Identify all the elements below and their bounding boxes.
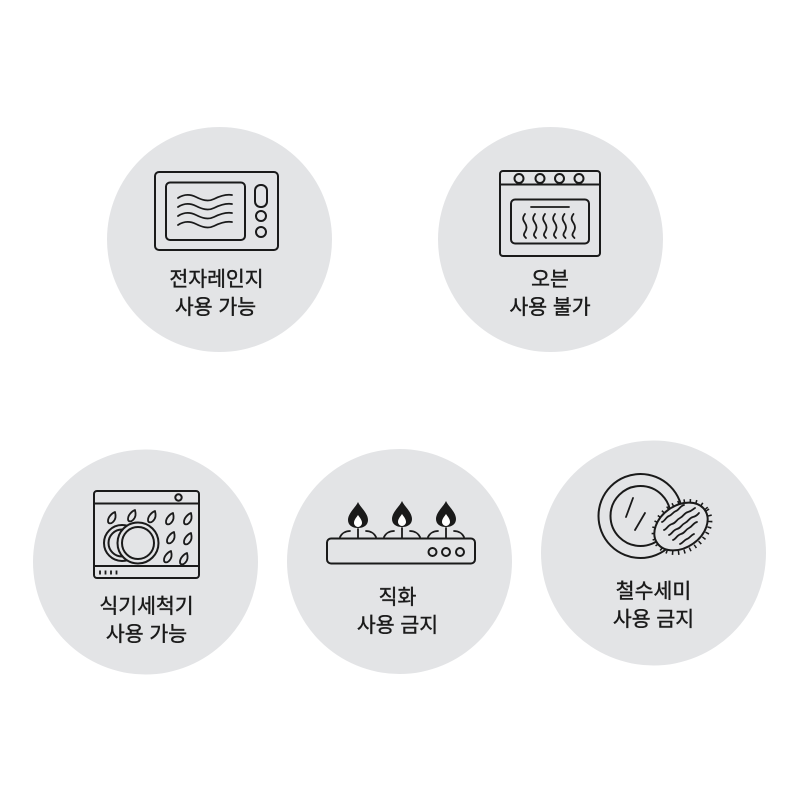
panel: oven — [438, 127, 663, 352]
label: open flame: 직화 — [379, 586, 416, 609]
label: dishwasher: 식기세척기 — [99, 595, 194, 618]
icon: plate and steel scrubber — [598, 474, 720, 564]
icon: oven — [500, 171, 600, 256]
label: oven: 오븐 — [531, 268, 569, 291]
icon: dishwasher — [94, 491, 199, 578]
water drops — [108, 510, 192, 564]
panel: dishwasher — [33, 450, 258, 674]
icon: microwave — [155, 172, 278, 250]
label: steel wool: 사용 금지 — [613, 608, 694, 631]
flame 1 — [340, 502, 376, 538]
label: microwave: 전자레인지 — [169, 268, 264, 291]
icon: gas burner — [327, 501, 475, 564]
label: steel wool: 철수세미 — [616, 580, 691, 603]
label: oven: 사용 불가 — [509, 296, 591, 319]
flame 3 — [428, 501, 464, 538]
panel: open flame — [287, 449, 512, 674]
panel: steel wool — [541, 440, 766, 666]
flame 2 — [384, 501, 420, 538]
panel: microwave — [107, 127, 332, 352]
label: open flame: 사용 금지 — [357, 614, 438, 637]
label: dishwasher: 사용 가능 — [106, 623, 187, 646]
label: microwave: 사용 가능 — [175, 296, 256, 319]
